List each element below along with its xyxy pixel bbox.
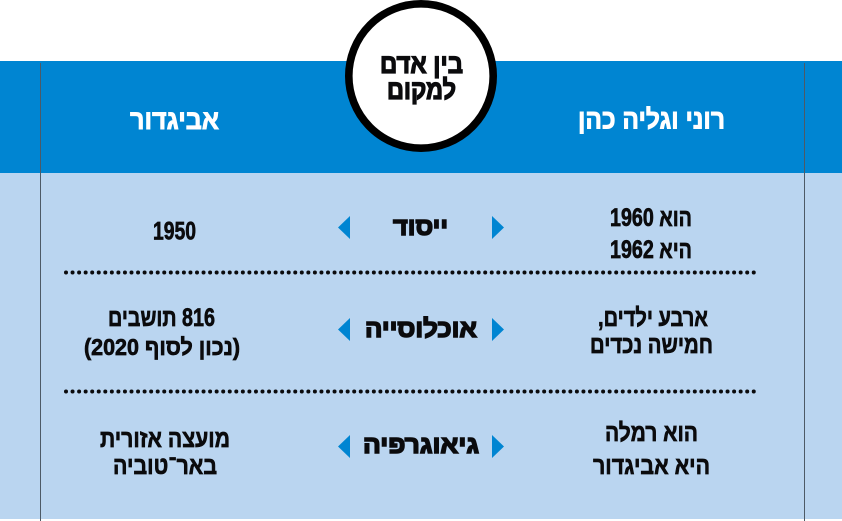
right vertical rule: [804, 63, 806, 521]
row: founding: [153, 204, 692, 264]
founding value, right column: הוא 1960: [610, 204, 692, 232]
population value, right column: חמישה נכדים: [590, 331, 713, 359]
geography value, left column: [100, 425, 230, 480]
founding value, right column: [610, 204, 692, 264]
header band: [0, 61, 842, 173]
founding label: ייסוד: [393, 213, 448, 241]
founding value, right column: היא 1962: [610, 236, 692, 264]
founding value, left column: 1950: [153, 218, 196, 246]
population value, right column: [590, 304, 713, 359]
population value, right column: ארבע ילדים,: [598, 304, 708, 332]
population value, left column: [84, 304, 240, 360]
geography value, left column: באר־טוביה: [113, 452, 217, 480]
geography value, left column: מועצה אזורית: [100, 425, 230, 453]
geography value, right column: היא אביגדור: [593, 452, 710, 480]
title badge: למקום: [387, 75, 456, 105]
column heading: left: אביגדור: [130, 105, 219, 135]
arrow left: [338, 435, 350, 458]
population value, left column: 816 תושבים: [108, 304, 215, 332]
arrow left: [338, 318, 350, 341]
title badge: [349, 4, 493, 148]
row: geography: [100, 419, 710, 480]
geography value, right column: [593, 419, 710, 480]
population label: אוכלוסייה: [365, 315, 477, 343]
dotted divider 2: [66, 390, 757, 394]
arrow right: [492, 435, 504, 458]
left vertical rule: [40, 63, 42, 521]
population value, left column: (נכון לסוף 2020): [84, 334, 240, 360]
dotted divider 1: [66, 270, 757, 274]
table body panel: [0, 173, 842, 519]
title badge: בין אדם: [380, 49, 463, 79]
geography value, right column: הוא רמלה: [605, 419, 698, 447]
column heading: right: רוני וגליה כהן: [578, 104, 725, 134]
arrow right: [492, 216, 504, 239]
geography label: גיאוגרפיה: [363, 431, 479, 459]
row: population: [84, 304, 713, 360]
arrow left: [338, 216, 350, 239]
arrow right: [492, 318, 504, 341]
